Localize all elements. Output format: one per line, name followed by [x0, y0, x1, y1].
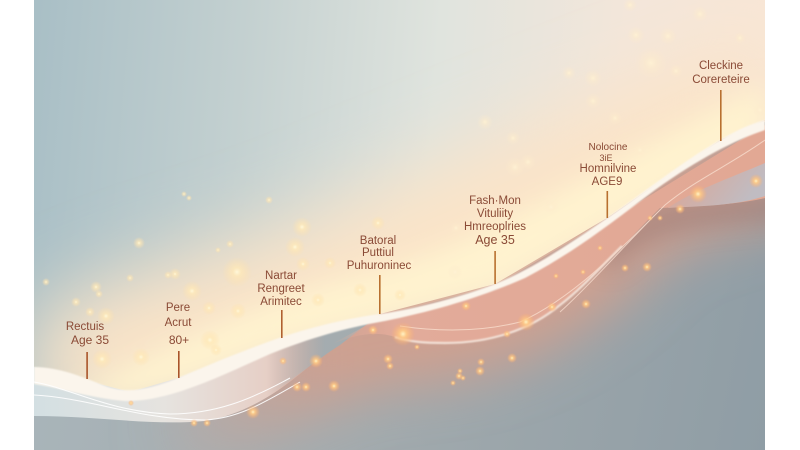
wave: left pale band: [34, 338, 317, 422]
label: stage 3: Rengreet: [257, 283, 305, 295]
label: stage 4: [347, 235, 412, 314]
warm glow above the curve: [34, 66, 758, 391]
wave: central peach lobe: [330, 125, 765, 345]
label: stage 1: [66, 321, 109, 379]
wave: right grey lobe: [668, 163, 765, 208]
label: stage 1: Rectuis: [66, 321, 104, 333]
label: stage 2: Pere: [166, 302, 190, 314]
label: stage 4: Puhuroninec: [347, 260, 412, 272]
label: stage 2: 80+: [169, 333, 189, 347]
peach shading under the curve: [150, 165, 790, 430]
label: stage 3: [257, 270, 305, 338]
label: stage 5: [464, 195, 526, 284]
glowing particles above the curve: [42, 0, 767, 369]
wave: white ribbon: [34, 120, 765, 401]
label: stage 7: Cleckine: [699, 60, 743, 72]
label: stage 6: Homnilvine: [580, 163, 636, 175]
glowing particles below the curve: [128, 174, 763, 427]
label: stage 2: Acrut: [165, 317, 192, 329]
lower background: [34, 122, 765, 450]
label: stage 5: Hmreoplries: [464, 221, 526, 233]
label: stage 6: 3iE: [599, 153, 613, 163]
label: stage 4: Batoral: [360, 235, 396, 247]
label: stage 5: Vituliity: [477, 208, 513, 220]
wave: lobe rim: [395, 246, 622, 343]
label: stage 5: Fash·Mon: [469, 195, 521, 207]
label: stage 7: Corereteire: [692, 74, 750, 86]
label: stage 6: [580, 142, 636, 218]
label: stage 1: Age 35: [71, 333, 109, 347]
label: stage 4: Puttiul: [362, 247, 394, 259]
background gradient: [34, 0, 765, 382]
label: stage 5: Age 35: [475, 233, 515, 247]
label: stage 6: AGE9: [592, 176, 622, 188]
label: stage 3: Arimitec: [260, 296, 302, 308]
label: stage 2: [165, 302, 192, 378]
wave: white highlight strands: [34, 140, 765, 420]
label: stage 7: [692, 60, 750, 141]
label: stage 3: Nartar: [265, 270, 297, 282]
label: stage 6: Nolocine: [589, 142, 628, 153]
